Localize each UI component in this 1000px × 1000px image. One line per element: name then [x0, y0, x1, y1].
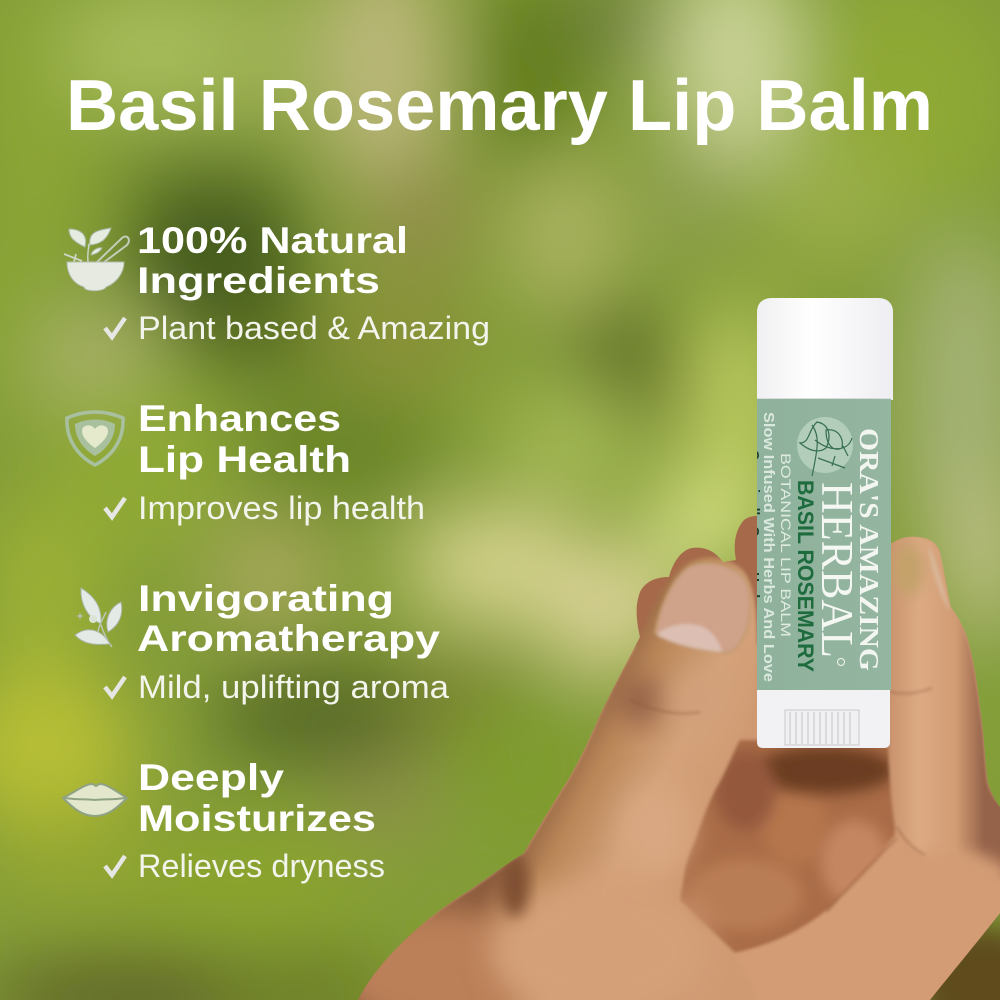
fingers behind the thumb — [636, 516, 757, 646]
feature: deeply moisturizes: Relieves dryness — [138, 848, 385, 884]
product: lip balm tube — [745, 298, 893, 748]
icon: lips — [63, 784, 127, 816]
curled fingers in shadow — [680, 740, 895, 953]
cap seam — [757, 398, 891, 400]
icon: check mark — [105, 856, 125, 875]
feature: enhances lip health: Lip Health — [138, 439, 351, 480]
feature: 100% natural ingredients: 100% Natural — [137, 220, 408, 261]
feature: invigorating aromatherapy: Aromatherapy — [137, 618, 441, 659]
feature: enhances lip health: Enhances — [138, 398, 341, 439]
icon: mortar and pestle with leaves — [64, 228, 129, 291]
tube label — [745, 398, 891, 690]
tube base with twist dial — [757, 688, 890, 748]
label text: BASIL ROSEMARY — [793, 480, 818, 672]
label text: Organically Grown Herbs — [745, 450, 762, 610]
icon: sprig of leaves — [75, 588, 122, 647]
title: Basil Rosemary Lip Balm — [66, 66, 933, 146]
icon: check mark — [105, 498, 125, 517]
label text: BOTANICAL LIP BALM — [778, 453, 793, 637]
feature: enhances lip health: Improves lip health — [138, 490, 425, 526]
label text — [757, 412, 878, 682]
feature: invigorating aromatherapy: Invigorating — [138, 578, 394, 619]
icon: check mark — [105, 677, 125, 696]
hand holding the tube — [340, 500, 1000, 1000]
feature: deeply moisturizes — [63, 757, 385, 884]
feature: invigorating aromatherapy — [75, 578, 449, 705]
icon: check mark — [105, 318, 125, 337]
skin creases — [630, 688, 932, 912]
feature: 100% natural ingredients — [64, 220, 490, 346]
feature: enhances lip health — [67, 398, 425, 526]
label text: ORA'S AMAZING — [854, 428, 884, 671]
feature: deeply moisturizes: Deeply — [138, 757, 284, 798]
feature: invigorating aromatherapy: Mild, uplifting aroma — [138, 669, 449, 705]
feature: 100% natural ingredients: Ingredients — [137, 260, 380, 301]
feature: 100% natural ingredients: Plant based & Amazing — [138, 310, 490, 346]
thumb — [340, 557, 762, 1000]
label text: HERBAL — [812, 482, 862, 658]
label botanical emblem — [797, 417, 853, 476]
right finger — [887, 537, 1000, 881]
thumb nail — [655, 563, 750, 653]
icon: shield with heart — [67, 412, 123, 465]
palm — [792, 849, 892, 934]
tube cap — [757, 298, 893, 400]
label text: Slow Infused With Herbs And Love — [760, 412, 777, 682]
skin tone patches — [340, 670, 732, 1000]
feature: deeply moisturizes: Moisturizes — [138, 798, 376, 839]
